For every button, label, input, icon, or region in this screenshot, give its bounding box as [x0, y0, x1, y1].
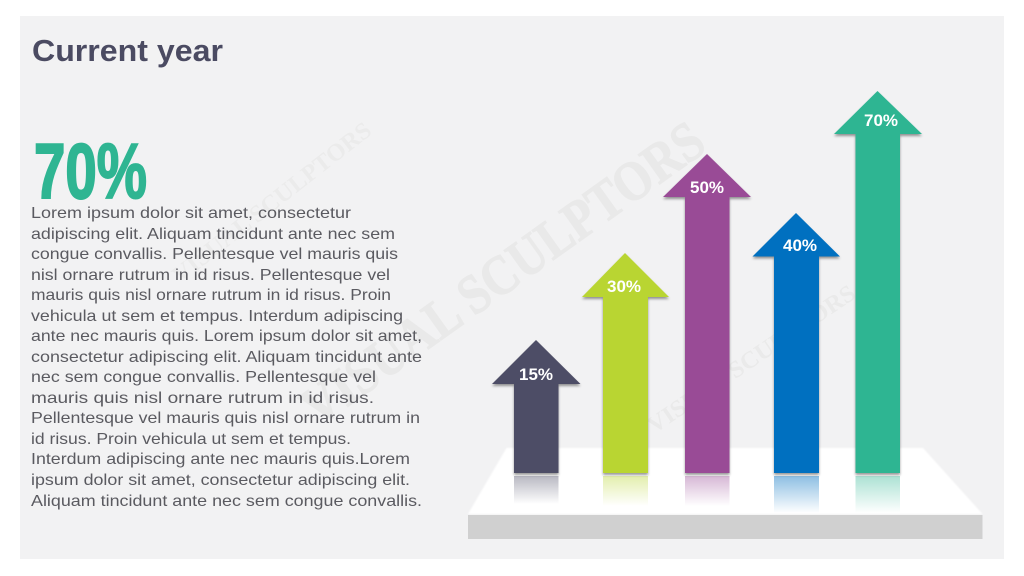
body text block: consectetur adipiscing elit. Aliquam tincidunt ante: [31, 349, 422, 366]
watermark: right: VISUAL SCULPTORS: [643, 280, 860, 439]
big percentage: 70%: [34, 127, 147, 215]
platform: [468, 448, 982, 539]
body text block: mauris quis nisl ornare rutrum in id risus.: [31, 390, 374, 407]
watermark: large: VISUAL SCULPTORS: [290, 109, 716, 439]
arrow: 40%: 40%: [783, 236, 817, 255]
body text block: Lorem ipsum dolor sit amet, consectetur: [31, 205, 352, 222]
watermark: left: VISUAL SCULPTORS: [168, 117, 377, 289]
body text block: ante nec mauris quis. Lorem ipsum dolor sit amet,: [31, 328, 422, 345]
body text block: Aliquam tincidunt ante nec sem congue convallis.: [31, 493, 422, 510]
body text block: nisl ornare rutrum in id risus. Pellentesque vel: [31, 267, 390, 284]
body text block: Pellentesque vel mauris quis nisl ornare rutrum in: [31, 410, 420, 427]
title: Current year: [32, 33, 223, 68]
arrow: 70%: [834, 91, 922, 513]
body text block: ipsum dolor sit amet, consectetur adipiscing elit.: [31, 472, 410, 489]
arrow: 15%: 15%: [519, 365, 553, 384]
body text block: adipiscing elit. Aliquam tincidunt ante nec sem: [31, 226, 395, 243]
body text block: congue convallis. Pellentesque vel mauris quis: [31, 246, 398, 263]
body text block: id risus. Proin vehicula ut sem et tempus.: [31, 431, 351, 448]
body text block: [31, 205, 422, 510]
arrow: 30%: [582, 253, 669, 506]
arrow: 70%: 70%: [864, 111, 898, 130]
arrow: 50%: 50%: [690, 178, 724, 197]
body text block: nec sem congue convallis. Pellentesque vel: [31, 369, 376, 386]
arrow: 50%: [663, 154, 751, 506]
arrow: 30%: 30%: [607, 277, 641, 296]
arrow: 15%: [492, 340, 580, 504]
body text block: mauris quis nisl ornare rutrum in id risus. Proin: [31, 287, 391, 304]
arrow: 40%: [752, 213, 840, 513]
body text block: Interdum adipiscing ante nec mauris quis.Lorem: [31, 451, 410, 468]
body text block: vehicula ut sem et tempus. Interdum adipiscing: [31, 308, 403, 325]
